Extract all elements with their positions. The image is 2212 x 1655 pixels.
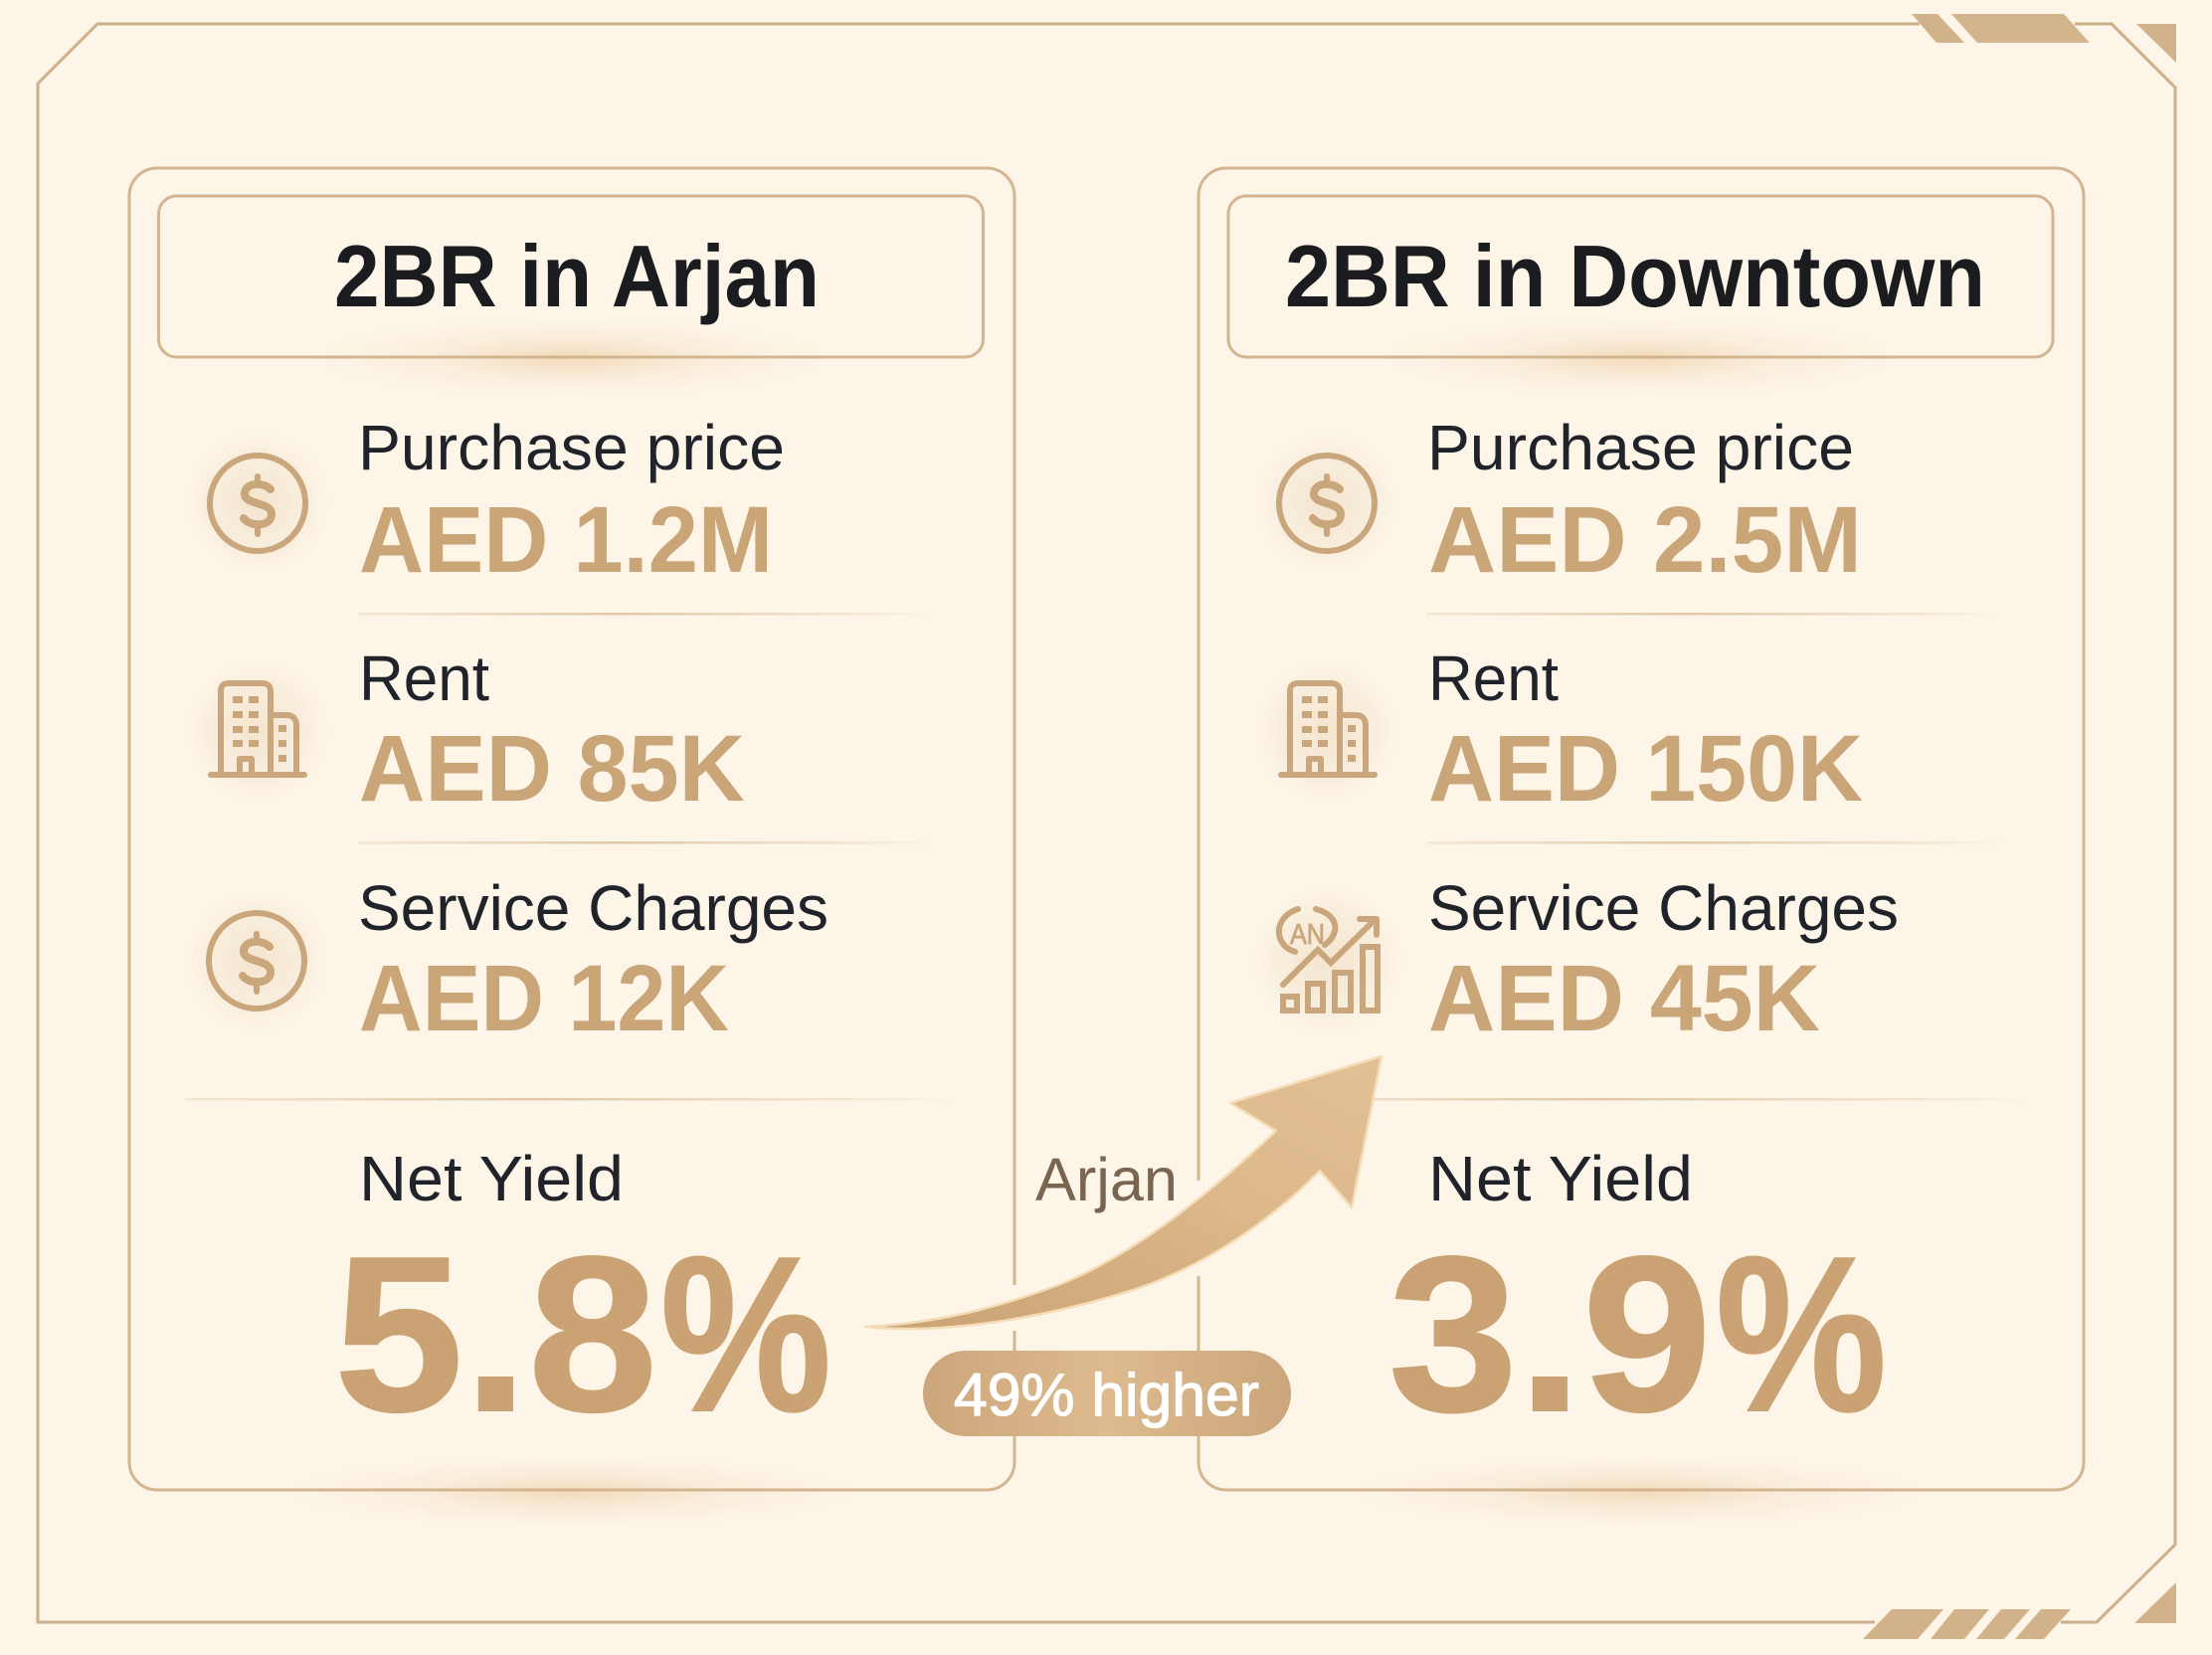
panel bottom glow	[1352, 1456, 1929, 1528]
pill: 49% higher: 49% higher	[954, 1362, 1259, 1428]
value: AED 85K: AED 85K	[359, 716, 745, 822]
icon: chart with arrow: AN	[1290, 919, 1325, 951]
label: net yield: Net Yield	[1428, 1143, 1693, 1214]
arrow	[865, 1056, 1382, 1329]
header glow	[312, 318, 830, 398]
icon: dollar coin	[185, 889, 328, 1032]
value: AED 2.5M: AED 2.5M	[1428, 487, 1862, 593]
icon: buildings	[1255, 659, 1398, 803]
panel: 2BR in Downtown	[1198, 168, 2084, 1528]
value: AED 150K: AED 150K	[1428, 716, 1863, 822]
heading: 2BR in Arjan	[334, 227, 820, 325]
value: AED 45K: AED 45K	[1428, 946, 1820, 1051]
arrow label: Arjan	[1035, 1146, 1178, 1213]
value: AED 1.2M: AED 1.2M	[359, 487, 773, 593]
icon: chart with arrow	[1253, 885, 1404, 1036]
label: purchase price: Purchase price	[1427, 412, 1854, 483]
label: rent: Rent	[359, 643, 489, 714]
heading: 2BR in Downtown	[1285, 227, 1985, 325]
value: 3.9%: %	[1716, 1211, 1887, 1458]
label: rent: Rent	[1428, 643, 1559, 714]
header glow	[1382, 318, 1899, 398]
comparison: higher yield in Arjan	[865, 1056, 1382, 1436]
icon: dollar coin	[1255, 432, 1398, 575]
label: net yield: Net Yield	[359, 1143, 624, 1214]
label: service charges: Service Charges	[1428, 872, 1899, 944]
heading box	[1228, 196, 2053, 357]
heading box	[159, 196, 983, 357]
border outline	[1198, 168, 2084, 1490]
value: AED 12K: AED 12K	[359, 946, 729, 1051]
pill: 49% higher	[923, 1351, 1291, 1436]
border outline	[129, 168, 1014, 1490]
panel: 2BR in Arjan	[129, 168, 1014, 1528]
label: purchase price: Purchase price	[358, 412, 785, 483]
icon: buildings	[186, 659, 329, 803]
value: 5.8%: %	[660, 1211, 831, 1458]
value: 5.8%: 5.8	[334, 1211, 657, 1458]
label: service charges: Service Charges	[358, 872, 829, 944]
value: 3.9%: 3.9	[1388, 1211, 1712, 1458]
icon: dollar coin	[186, 432, 329, 575]
panel bottom glow	[282, 1456, 859, 1528]
